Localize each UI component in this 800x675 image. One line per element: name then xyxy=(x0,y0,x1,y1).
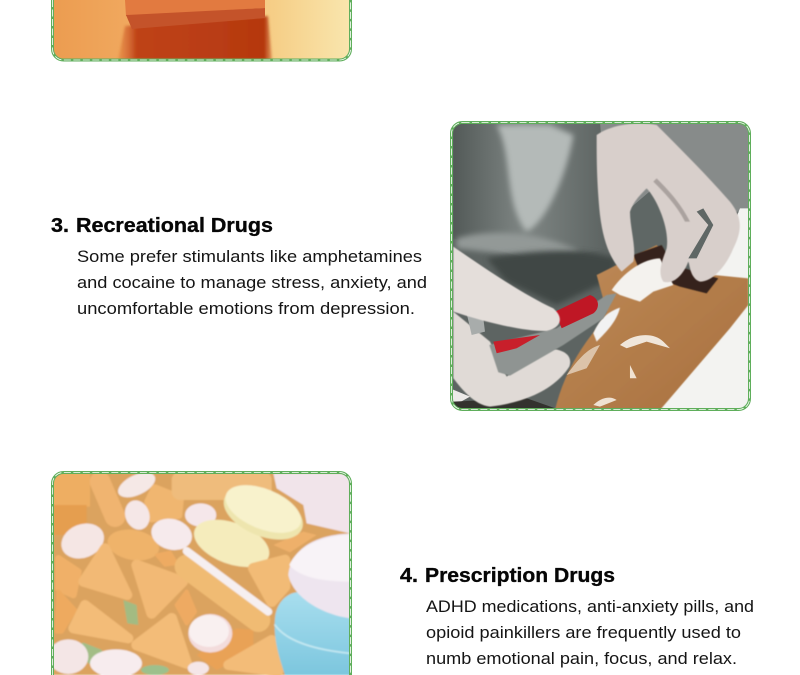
section 3 body text: uncomfortable emotions from depression. xyxy=(77,299,415,318)
section 4 body text: opioid painkillers are frequently used to xyxy=(426,623,741,642)
section 3 body text: and cocaine to manage stress, anxiety, and xyxy=(77,273,427,292)
section 4 body text: numb emotional pain, focus, and relax. xyxy=(426,649,737,668)
package xyxy=(555,245,748,410)
image: pile of coloured pills xyxy=(48,467,351,675)
image: gloved hands cutting a package xyxy=(450,122,750,412)
left glove: thumb xyxy=(453,247,560,331)
section 4 heading: Prescription Drugs: Prescription Drugs xyxy=(425,564,615,587)
section 3 heading: Recreational Drugs: Recreational Drugs xyxy=(76,214,273,237)
image: orange box on table (cropped) xyxy=(52,0,351,60)
knife xyxy=(489,293,617,376)
section 4 body text xyxy=(426,597,754,668)
section 4 heading: Prescription Drugs: 4. xyxy=(400,564,418,587)
section 4 body text: ADHD medications, anti-anxiety pills, and xyxy=(426,597,754,616)
left glove: palm xyxy=(453,312,570,407)
right glove xyxy=(597,123,740,282)
section 3 body text: Some prefer stimulants like amphetamines xyxy=(77,247,422,266)
section 3 heading: Recreational Drugs: 3. xyxy=(51,214,69,237)
section 3 body text xyxy=(77,247,427,318)
